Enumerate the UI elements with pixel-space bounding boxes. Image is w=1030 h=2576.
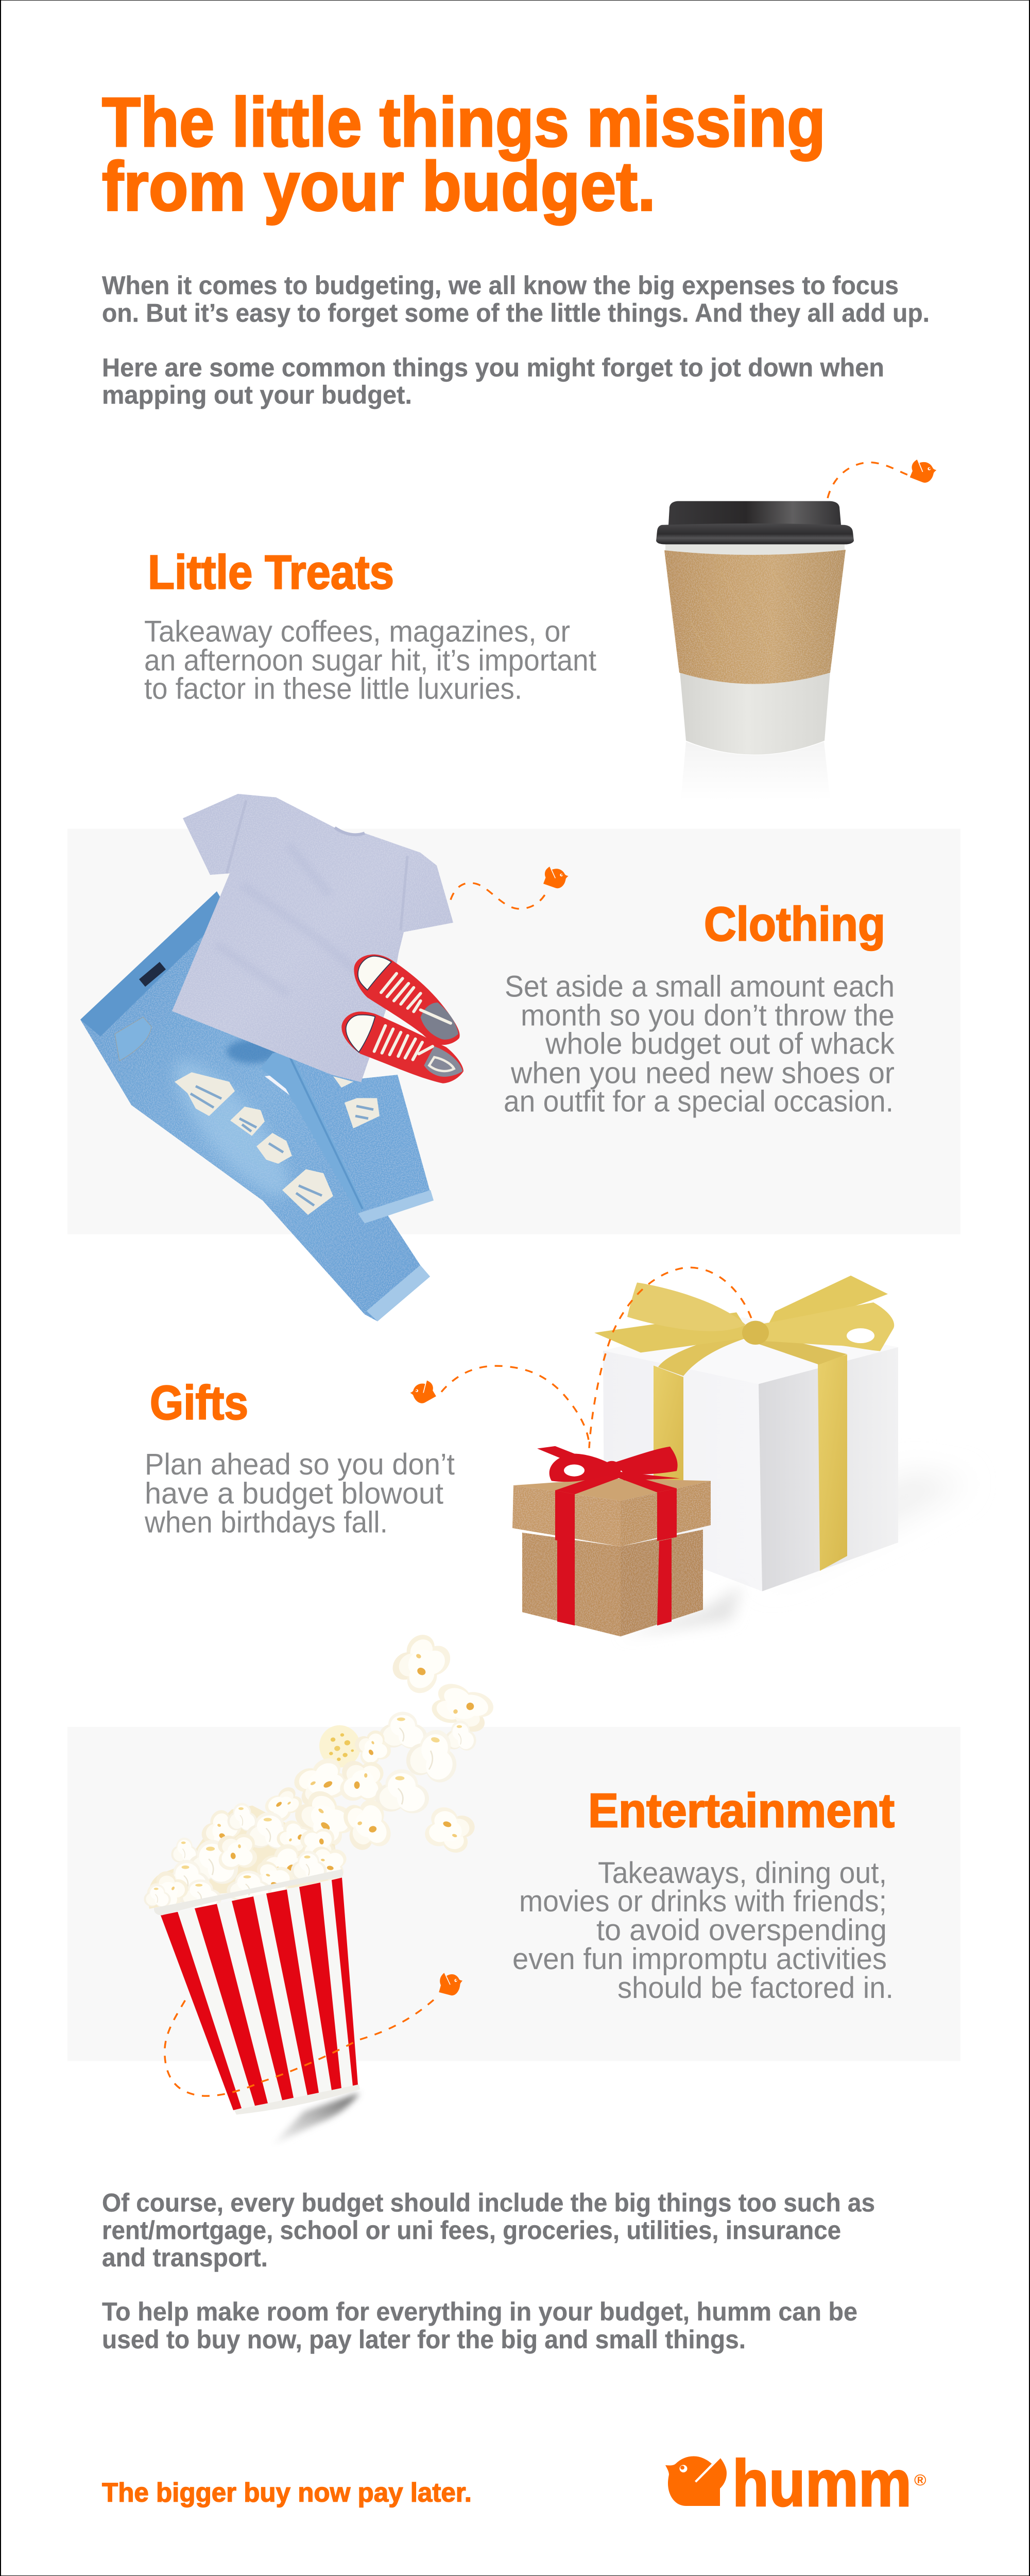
illustration: kraft gift box with red ribbon [512,1446,742,1636]
text: gifts [144,1447,455,1539]
heading: clothing: Clothing [704,897,885,951]
gold bow [594,1276,894,1352]
icon: bird [907,458,938,485]
title: The little things missing [102,83,826,161]
flying popcorn [261,1629,497,1856]
text: entertainment: Takeaways, dining out, [598,1856,887,1890]
intro text [102,271,930,409]
title: from your budget. [102,147,656,226]
closing text [102,2189,875,2354]
text: clothing: Set aside a small amount each [505,970,895,1003]
icon: bird [541,865,570,891]
text: entertainment: even fun impromptu activities [512,1942,887,1976]
text: little treats: Takeaway coffees, magazines, or [144,615,570,648]
red bow [537,1446,680,1482]
closing text: rent/mortgage, school or uni fees, groceries, utilities, insurance [102,2216,841,2245]
text: entertainment [512,1856,894,2005]
text: entertainment: movies or drinks with friends; [519,1884,887,1918]
icon: bird [437,1972,464,1997]
icon: bird [408,1379,438,1406]
intro text: Here are some common things you might forget to jot down when [102,353,884,382]
section: gifts [144,1267,968,1636]
intro text: on. But it’s easy to forget some of the little things. And they all add up. [102,298,930,327]
text: clothing: month so you don’t throw the [521,998,895,1032]
t-shirt [172,794,453,1082]
illustration: white gift box [594,1276,968,1591]
section: entertainment [67,1629,960,2146]
closing text: Of course, every budget should include the big things too such as [102,2189,875,2217]
text: clothing [504,970,895,1118]
tagline: The bigger buy now pay later. [102,2478,472,2507]
jeans [80,891,434,1321]
section: little treats [144,458,938,800]
sneakers [341,955,464,1083]
text: gifts: when birthdays fall. [144,1505,388,1539]
text: entertainment: to avoid overspending [596,1913,887,1947]
arrow: dashed path around bucket [165,2000,434,2096]
heading: gifts: Gifts [150,1376,248,1429]
panel: clothing background [67,828,960,1234]
logo wordmark: humm [732,2447,912,2520]
closing text: and transport. [102,2243,268,2272]
section: clothing [67,794,960,1321]
illustration: coffee cup [656,501,854,800]
intro text: When it comes to budgeting, we all know the big expenses to focus [102,271,899,300]
red and white striped bucket [154,1869,360,2115]
logo bird [665,2456,727,2506]
popcorn in bucket [143,1803,348,1915]
arrow: dashed path around gift boxes [441,1267,752,1448]
arrow: dashed path from cup [828,462,907,498]
text: entertainment: should be factored in. [617,1971,894,2005]
intro text: mapping out your budget. [102,380,412,409]
text: gifts: Plan ahead so you don’t [145,1447,455,1481]
heading: entertainment: Entertainment [588,1784,895,1837]
illustration: jeans, t-shirt and sneakers [80,794,464,1321]
text: little treats [144,615,596,705]
text: clothing: an outfit for a special occasion. [504,1084,894,1118]
heading: little treats: Little Treats [148,546,394,599]
illustration: popcorn bucket [143,1629,497,2146]
text: little treats: an afternoon sugar hit, it’s important [144,643,596,677]
bucket shadow [270,2093,359,2146]
title [102,83,826,226]
text: gifts: have a budget blowout [145,1477,443,1511]
text: clothing: when you need new shoes or [510,1056,895,1090]
registered mark: ® [914,2471,926,2489]
logo: humm [665,2447,926,2520]
closing text: To help make room for everything in your budget, humm can be [102,2297,857,2326]
arrow: dashed path from t-shirt [451,883,547,909]
text: little treats: to factor in these little luxuries. [144,672,522,705]
text: clothing: whole budget out of whack [545,1027,895,1060]
closing text: used to buy now, pay later for the big and small things. [102,2325,746,2354]
panel: entertainment background [67,1727,960,2061]
